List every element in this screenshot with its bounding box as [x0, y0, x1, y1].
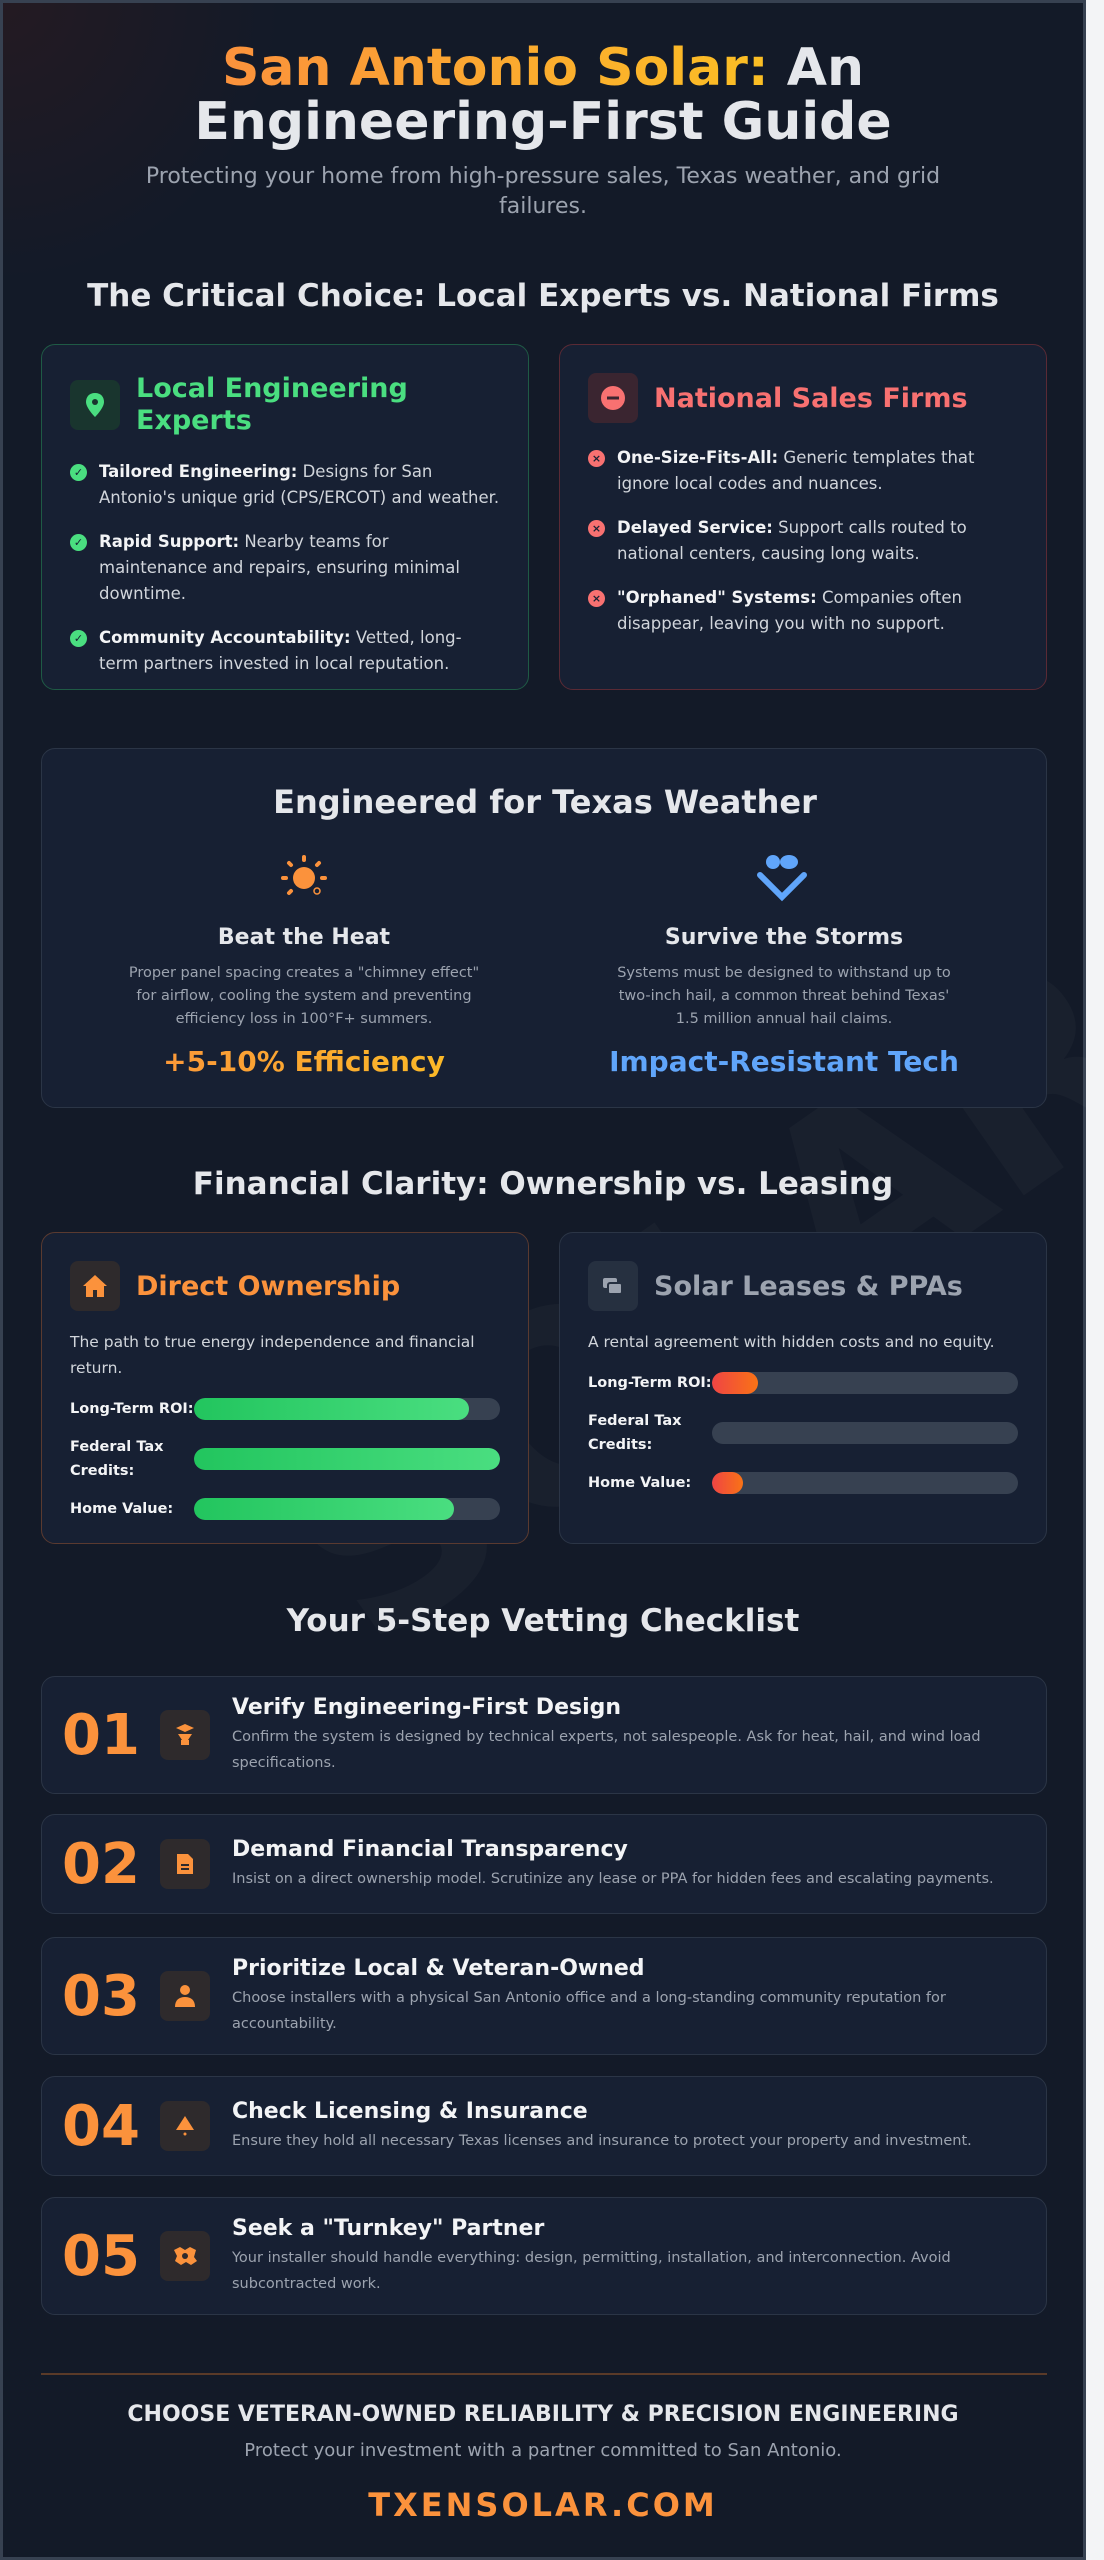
- column: storms: Impact-Resistant Tech: [609, 1045, 959, 1078]
- footer subtitle: Protect your investment with a partner committed to San Antonio.: [244, 2440, 842, 2461]
- step 01: [41, 1676, 1047, 1794]
- step 02: Insist on a direct ownership model. Scrutinize any lease or PPA for hidden fees and escalating payments.: [232, 1870, 994, 1886]
- heading: leases: [588, 1261, 963, 1311]
- icon: sun: [281, 855, 327, 896]
- heading: weather: Engineered for Texas Weather: [273, 783, 817, 821]
- step 04: [41, 2076, 1047, 2176]
- heading: financial: Financial Clarity: Ownership vs. Leasing: [193, 1166, 893, 1202]
- panel: ownership: [41, 1232, 529, 1544]
- heading: national: [588, 373, 968, 423]
- panel: leases: [559, 1232, 1047, 1544]
- bar chart: leases: [588, 1372, 1018, 1494]
- heading: local: Local Engineering: [136, 373, 408, 404]
- heading: checklist: Your 5-Step Vetting Checklist: [287, 1603, 799, 1639]
- list: local benefits: Tailored Engineering: Designs for San Antonio's unique grid (CPS/ERCOT) and weather.: [99, 462, 499, 507]
- column: storms: [609, 855, 959, 1078]
- list: local benefits: Community Accountability: Vetted, long-term partners invested in local reputation.: [99, 628, 462, 673]
- subtitle: Protecting your home from high-pressure sales, Texas weather, and grid failures.: [146, 164, 940, 219]
- heading: national: National Sales Firms: [654, 382, 968, 414]
- bar chart: ownership: Federal Tax Credits:: [70, 1439, 163, 1479]
- bar chart: ownership: Long-Term ROI:: [70, 1401, 194, 1417]
- step 01: Verify Engineering-First Design: [232, 1694, 621, 1720]
- step 04: Check Licensing & Insurance: [232, 2098, 588, 2124]
- step 05: 05: [62, 2224, 140, 2288]
- step 02: Demand Financial Transparency: [232, 1836, 628, 1862]
- step 05: Your installer should handle everything: design, permitting, installation, and interconnection. Avoid subcontracted work.: [232, 2250, 951, 2292]
- list: local benefits: Rapid Support: Nearby teams for maintenance and repairs, ensuring minimal downtime.: [99, 532, 460, 603]
- step 03: [41, 1937, 1047, 2055]
- list: national drawbacks: Delayed Service: Support calls routed to national centers, causing long waits.: [617, 518, 967, 563]
- panel: local experts: [41, 344, 529, 690]
- step 04: Ensure they hold all necessary Texas licenses and insurance to protect your property and investment.: [232, 2132, 972, 2148]
- step 02: [41, 1814, 1047, 1914]
- list: local benefits: ✓: [74, 632, 83, 644]
- step 02: 02: [62, 1832, 140, 1896]
- text: A rental agreement with hidden costs and no equity.: [588, 1333, 994, 1351]
- column: storms: Survive the Storms: [665, 925, 903, 950]
- footer heading: CHOOSE VETERAN-OWNED RELIABILITY & PRECISION ENGINEERING: [127, 2402, 959, 2427]
- heading: local: [70, 373, 408, 436]
- bar chart: ownership: [70, 1398, 500, 1520]
- heading: ownership: Direct Ownership: [136, 1270, 400, 1302]
- column: heat: Beat the Heat: [218, 925, 390, 950]
- list: local benefits: ✓: [74, 536, 83, 548]
- bar chart: leases: Federal Tax Credits:: [588, 1413, 681, 1453]
- column: heat: Proper panel spacing creates a "chimney effect" for airflow, cooling the system and preventing efficiency loss in 100°F+ summers.: [129, 965, 479, 1027]
- bar chart: leases: Long-Term ROI:: [588, 1375, 712, 1391]
- heading: leases: Solar Leases & PPAs: [654, 1270, 963, 1302]
- heading: local: Experts: [136, 405, 252, 436]
- list: local benefits: [70, 462, 499, 673]
- text: The path to true energy independence and financial return.: [70, 1333, 475, 1377]
- list: national drawbacks: ×: [592, 592, 601, 604]
- list: local benefits: ✓: [74, 466, 83, 478]
- heading: critical choice: The Critical Choice: Local Experts vs. National Firms: [87, 278, 999, 314]
- title: Engineering-First Guide: [194, 92, 892, 152]
- step 01: Confirm the system is designed by technical experts, not salespeople. Ask for heat, hail, and wind load specifications.: [232, 1728, 981, 1770]
- step 03: Choose installers with a physical San Antonio office and a long-standing community reputation for accountability.: [232, 1990, 946, 2032]
- list: national drawbacks: "Orphaned" Systems: Companies often disappear, leaving you with no support.: [617, 588, 962, 633]
- column: heat: +5-10% Efficiency: [163, 1045, 445, 1078]
- step 04: 04: [62, 2094, 140, 2158]
- icon: hail: [757, 855, 807, 902]
- panel: texas weather: [41, 748, 1047, 1108]
- heading: ownership: [70, 1261, 400, 1311]
- list: national drawbacks: One-Size-Fits-All: Generic templates that ignore local codes and nuances.: [617, 448, 974, 493]
- column: storms: Systems must be designed to withstand up to two-inch hail, a common threat behind Texas' 1.5 million annual hail claims.: [617, 965, 951, 1027]
- panel: national firms: [559, 344, 1047, 690]
- step 03: Prioritize Local & Veteran-Owned: [232, 1956, 645, 1980]
- divider: [41, 2373, 1047, 2374]
- title: San Antonio Solar: An: [222, 38, 864, 98]
- step 01: 01: [62, 1702, 140, 1768]
- step 05: Seek a "Turnkey" Partner: [232, 2216, 544, 2240]
- title: [194, 38, 892, 152]
- bar chart: leases: Home Value:: [588, 1475, 691, 1491]
- step 03: 03: [62, 1964, 140, 2028]
- list: national drawbacks: ×: [592, 522, 601, 534]
- list: national drawbacks: ×: [592, 452, 601, 464]
- bar chart: ownership: Home Value:: [70, 1501, 173, 1517]
- step 05: [41, 2197, 1047, 2315]
- column: heat: [129, 855, 479, 1078]
- list: national drawbacks: [588, 448, 974, 633]
- footer url: TXENSOLAR.COM: [368, 2486, 718, 2524]
